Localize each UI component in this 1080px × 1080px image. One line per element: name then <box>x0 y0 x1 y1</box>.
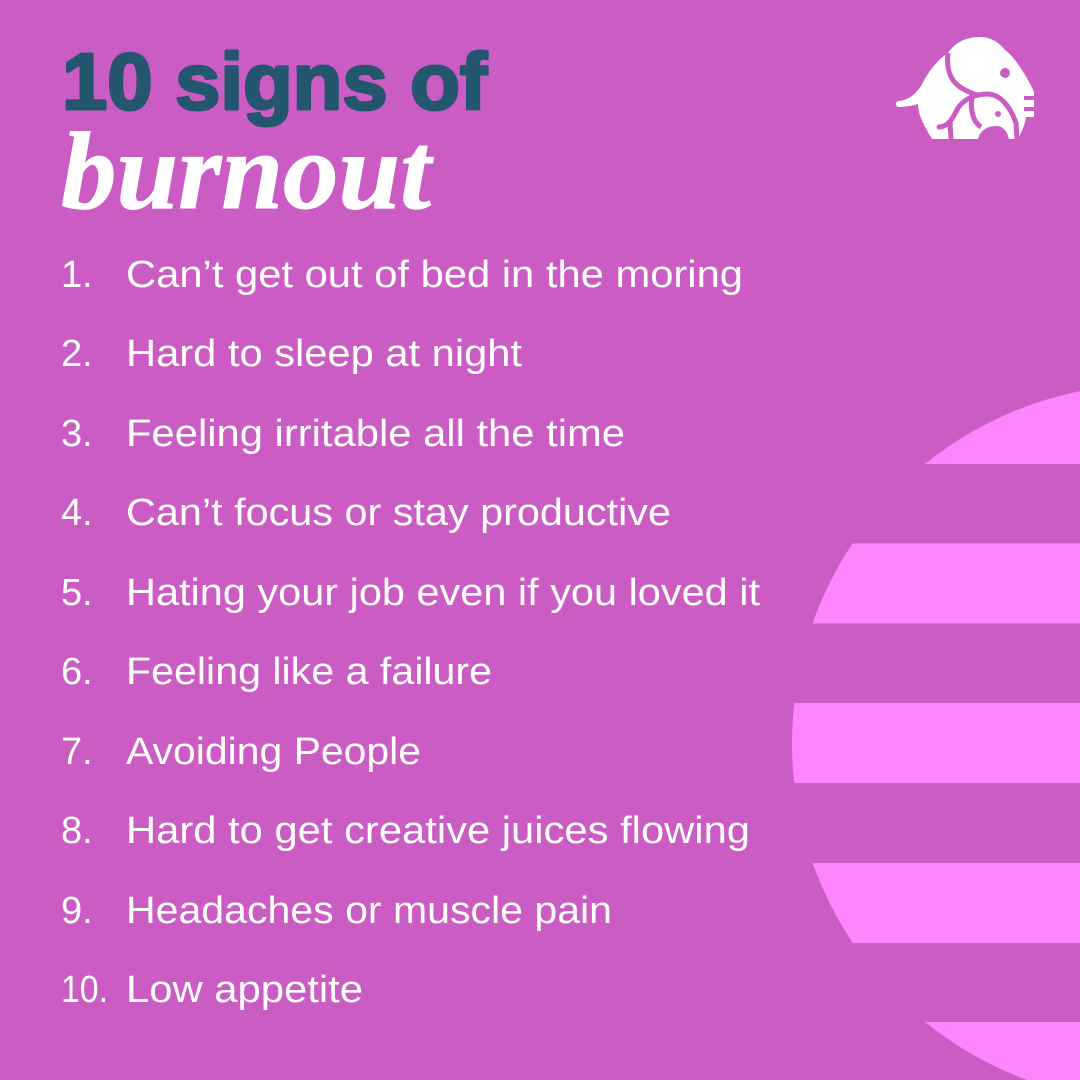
icon: elephant and calf logo <box>896 37 1035 139</box>
item 6: Feeling like a failure <box>126 651 492 693</box>
item 4: Can’t focus or stay productive <box>126 492 671 534</box>
item 6: 6. <box>61 651 93 693</box>
item 8: Hard to get creative juices flowing <box>126 810 750 852</box>
title line: 10 signs of: 10 signs of <box>62 37 487 126</box>
title <box>61 37 487 232</box>
item 7: Avoiding People <box>126 731 421 773</box>
item 1: 1. <box>61 254 93 296</box>
item 10: 10. <box>61 969 108 1011</box>
item 1: Can’t get out of bed in the moring <box>126 254 743 296</box>
item 9: Headaches or muscle pain <box>126 890 612 932</box>
item 5: 5. <box>61 572 93 614</box>
item 3: Feeling irritable all the time <box>126 413 625 455</box>
item 10: Low appetite <box>126 969 363 1011</box>
item 4: 4. <box>61 492 93 534</box>
item 2: 2. <box>61 333 93 375</box>
striped circle decoration <box>792 384 1080 1080</box>
item 8: 8. <box>61 810 93 852</box>
item 7: 7. <box>61 731 93 773</box>
item 2: Hard to sleep at night <box>126 333 522 375</box>
item 5: Hating your job even if you loved it <box>126 572 760 614</box>
item 3: 3. <box>61 413 93 455</box>
list: burnout signs <box>61 254 760 1011</box>
title line: burnout: burnout <box>61 110 434 232</box>
item 9: 9. <box>61 890 93 932</box>
